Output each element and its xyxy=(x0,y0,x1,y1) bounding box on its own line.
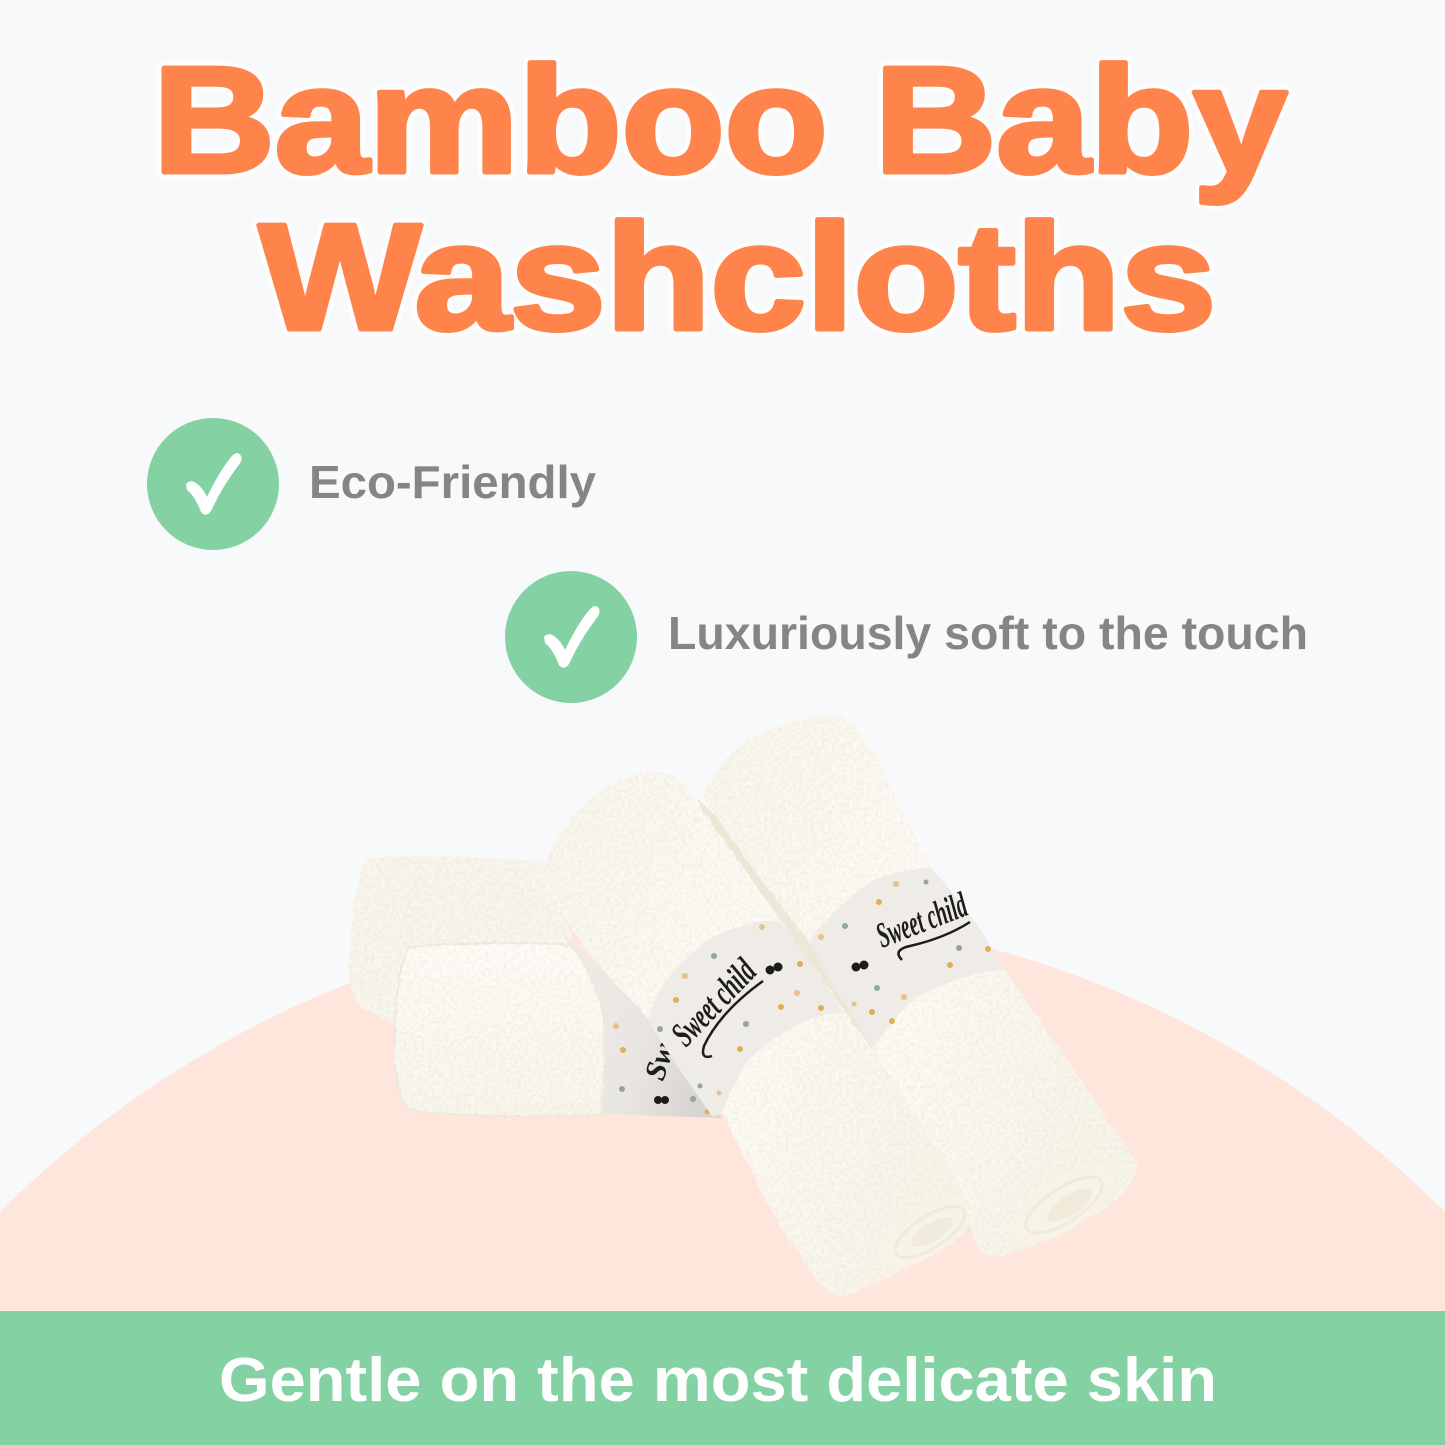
title xyxy=(153,35,1287,361)
title: Washcloths xyxy=(259,192,1216,361)
title: Washcloths xyxy=(259,192,1216,361)
left paper band: Sw xyxy=(638,1038,681,1084)
right roll xyxy=(703,716,1138,1258)
brand swash xyxy=(898,922,970,960)
brand text: Sweet child xyxy=(871,884,973,955)
middle roll xyxy=(540,771,985,1297)
banner text: Gentle on the most delicate skin xyxy=(219,1346,1217,1415)
icon: check badge 1 xyxy=(147,418,279,550)
title: Bamboo Baby xyxy=(153,35,1287,204)
band dots xyxy=(657,924,824,1096)
feature text: eco-friendly: Eco-Friendly xyxy=(309,456,596,508)
crease shadow between rolls xyxy=(697,798,985,1232)
left paper band xyxy=(565,935,722,1118)
title: Bamboo Baby xyxy=(153,35,1287,204)
band dots xyxy=(818,880,991,1024)
back left towel xyxy=(349,856,575,1026)
brand cherries xyxy=(852,960,868,972)
roll end spiral xyxy=(998,1150,1126,1258)
brand text: Sweet child xyxy=(663,951,764,1054)
brand swash xyxy=(703,981,763,1057)
front left towel xyxy=(394,943,605,1116)
brand cherries xyxy=(766,962,782,974)
paper band xyxy=(648,921,843,1117)
peach arc backdrop xyxy=(0,912,1445,1311)
product photo: rolled washcloths xyxy=(349,716,1138,1297)
icon: check badge 2 xyxy=(505,571,637,703)
paper band xyxy=(810,867,1005,1047)
roll end spiral xyxy=(865,1181,985,1283)
feature text: soft: Luxuriously soft to the touch xyxy=(668,607,1308,659)
bottom banner xyxy=(0,1311,1445,1445)
